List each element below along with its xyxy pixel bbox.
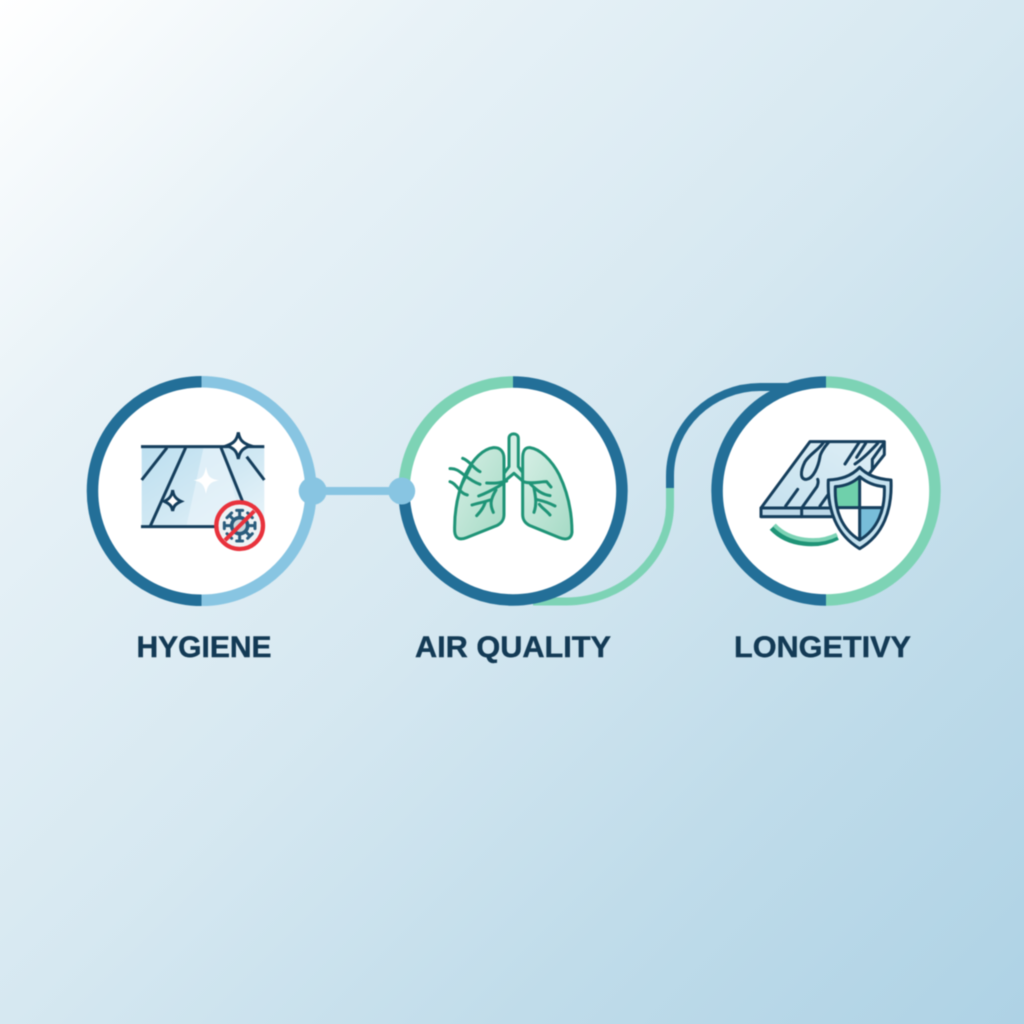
green arc [772, 528, 838, 544]
panel: air quality [404, 382, 622, 600]
label: hygiene: HYGIENE [136, 631, 272, 664]
air quality disc [409, 387, 617, 595]
panel: hygiene [92, 382, 311, 600]
longevity ring [717, 382, 935, 600]
hygiene disc [98, 387, 306, 595]
icon: floorboards with shield [761, 442, 891, 549]
label: air quality: AIR QUALITY [415, 631, 611, 664]
icon: clean window with no-virus badge [141, 432, 264, 549]
connector: hygiene to air quality [299, 477, 415, 505]
air quality ring [404, 382, 622, 600]
label: longetivy: LONGETIVY [734, 631, 911, 664]
icon: lungs [450, 434, 572, 539]
panel: longevity [717, 382, 935, 600]
no-virus badge [216, 502, 263, 549]
hygiene ring [92, 382, 311, 600]
longevity disc [722, 387, 930, 595]
connector: S-curve from air quality to longevity [533, 387, 790, 602]
shield [828, 467, 891, 549]
